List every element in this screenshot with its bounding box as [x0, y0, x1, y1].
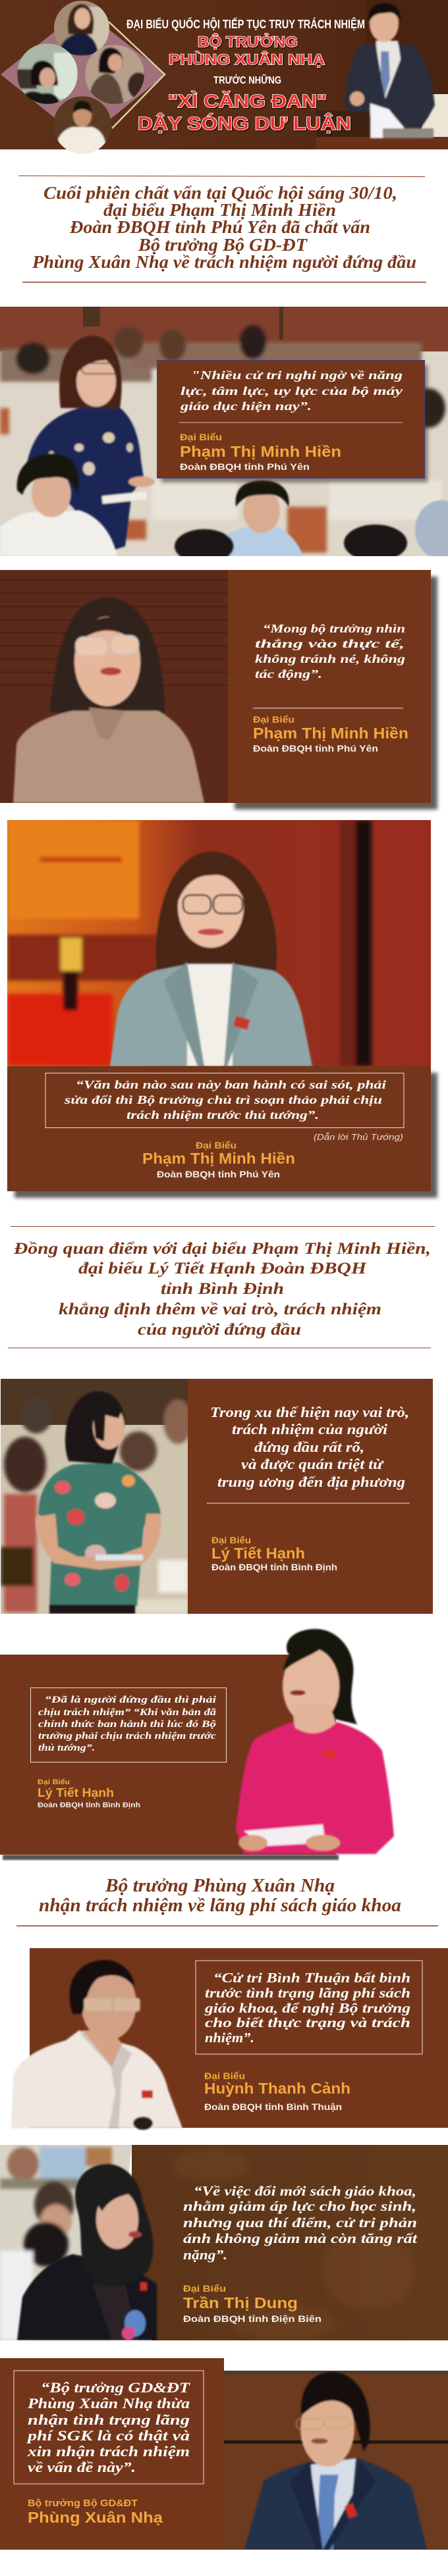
quote card 8: nhận tình trạng lãng — [28, 2411, 190, 2428]
heading: textbook responsibility — [16, 1876, 438, 1926]
quote card 8 — [0, 2358, 224, 2550]
quote card 4: Đoàn ĐBQH tỉnh Bình Định — [211, 1562, 337, 1572]
quote text 7: Đoàn ĐBQH tỉnh Điện Biên — [183, 2313, 322, 2324]
quote card 1: giáo dục hiện nay”. — [180, 399, 312, 413]
quote card 2: thẳng vào thực tế, — [255, 637, 405, 650]
delegate in grey jacket — [110, 852, 312, 1066]
quote card 2: tác động”. — [255, 667, 322, 681]
quote card 5: Đoàn ĐBQH tỉnh Bình Định — [38, 1801, 140, 1809]
photo: background delegates and brown panel — [0, 2145, 448, 2340]
photo: minister at the lectern — [224, 2371, 448, 2550]
quote card 6: “Cử tri Bình Thuận bất bình — [213, 1970, 410, 1986]
quote card 6: giáo khoa, để nghị Bộ trưởng — [204, 2000, 410, 2016]
panel: quote 7 Trần Thị Dung — [0, 2145, 448, 2340]
quote card 5 — [0, 1655, 336, 1855]
quote card 5: thủ tướng”. — [38, 1743, 95, 1753]
panel: quote 3 Phạm Thị Minh Hiền — [7, 820, 437, 1198]
quote card 2: Phạm Thị Minh Hiền — [253, 725, 408, 742]
panel: quote 1 Phạm Thị Minh Hiền with chamber photo — [0, 307, 448, 563]
panel shadow — [3, 1855, 339, 1860]
panel shadow — [14, 1073, 437, 1198]
intro text block: Đoàn ĐBQH tỉnh Phú Yên đã chất vấn — [69, 217, 370, 237]
quote card 8: về vấn đề này”. — [28, 2459, 136, 2475]
quote card 2: Đoàn ĐBQH tỉnh Phú Yên — [253, 743, 378, 754]
quote card 5: trưởng phải chịu trách nhiệm trước — [38, 1731, 216, 1741]
quote text 7: Trần Thị Dung — [183, 2294, 298, 2311]
panel: quote 8 Phùng Xuân Nhạ — [0, 2358, 448, 2550]
quote card 4: Lý Tiết Hạnh — [211, 1545, 305, 1562]
panel: quote 5 Lý Tiết Hạnh — [0, 1629, 394, 1860]
intro text block: Phùng Xuân Nhạ về trách nhiệm người đứng đầu — [32, 252, 416, 272]
quote card 3: trách nhiệm trước thủ tướng”. — [126, 1108, 319, 1121]
quote card 3: Phạm Thị Minh Hiền — [142, 1150, 295, 1167]
panel: quote 6 Huỳnh Thanh Cảnh — [11, 1948, 448, 2130]
portrait: woman left — [17, 43, 78, 105]
quote card 4: Trong xu thế hiện nay vai trò, — [210, 1404, 409, 1420]
quote card 1: Đoàn ĐBQH tỉnh Phú Yên — [180, 461, 310, 472]
heading: textbook responsibility: nhận trách nhiệm về lãng phí sách giáo khoa — [39, 1895, 401, 1916]
quote card 6: Đoàn ĐBQH tỉnh Bình Thuận — [204, 2101, 342, 2112]
quote card 3: “Văn bản nào sau này ban hành có sai sót, phải — [76, 1078, 386, 1091]
quote card 6: Huỳnh Thanh Cảnh — [204, 2080, 350, 2097]
header title: TRƯỚC NHỮNG — [213, 73, 281, 86]
quote card 2: không tránh né, không — [255, 652, 405, 665]
portrait: woman right — [85, 45, 149, 105]
quote card 3: Đoàn ĐBQH tỉnh Phú Yên — [157, 1169, 280, 1179]
quote card 8: Phùng Xuân Nhạ thừa — [27, 2395, 190, 2411]
quote card 1: Đại Biểu — [180, 432, 222, 442]
quote card 4 — [188, 1379, 433, 1614]
quote card 8: Phùng Xuân Nhạ — [28, 2509, 163, 2526]
quote text 7: nhưng qua thí điểm, cử tri phản — [183, 2215, 417, 2230]
header wood backdrop — [316, 0, 448, 149]
quote card 5: “Đã là người đứng đầu thì phải — [45, 1695, 217, 1705]
heading: Lý Tiết Hạnh section: của người đứng đầu — [138, 1321, 301, 1339]
minister portrait in header — [344, 3, 435, 138]
panel shadow — [235, 577, 437, 810]
quote card 4: và được quán triệt từ — [241, 1456, 384, 1472]
portrait: delegate in pink — [236, 1629, 394, 1854]
portrait: man in white shirt — [11, 1960, 182, 2130]
header title — [126, 17, 365, 134]
heading: Lý Tiết Hạnh section — [8, 1226, 435, 1348]
quote card 1: lực, tâm lực, uy lực của bộ máy — [181, 384, 403, 398]
quote card 2: Đại Biểu — [253, 714, 294, 725]
quote card 2: “Mong bộ trưởng nhìn — [263, 622, 405, 635]
quote card 4: đứng đầu rất rõ, — [254, 1439, 364, 1455]
quote card 4: Đại Biểu — [211, 1535, 251, 1545]
quote card 1: Phạm Thị Minh Hiền — [180, 443, 341, 460]
quote card 1: "Nhiều cử tri nghi ngờ về năng — [191, 369, 403, 382]
panel: quote 4 Lý Tiết Hạnh — [1, 1379, 433, 1614]
header title: DẬY SÓNG DƯ LUẬN — [138, 113, 351, 134]
photo: delegate portrait — [0, 570, 228, 803]
header title: ĐẠI BIỂU QUỐC HỘI TIẾP TỤC TRUY TRÁCH NHIỆM — [126, 17, 365, 31]
heading: Lý Tiết Hạnh section: tỉnh Bình Định — [161, 1280, 284, 1298]
heading: Lý Tiết Hạnh section: Đồng quan điểm với đại biểu Phạm Thị Minh Hiền, — [13, 1240, 431, 1258]
quote card 6: cho biết thực trạng và trách — [205, 2015, 410, 2030]
panel: quote 2 Phạm Thị Minh Hiền — [0, 570, 437, 810]
quote text 7: nhằm giảm áp lực cho học sinh, — [183, 2198, 416, 2214]
quote card 8: “Bộ trưởng GD&ĐT — [41, 2379, 191, 2396]
quote card 6: nhiệm”. — [205, 2030, 254, 2046]
header title: "XÌ CĂNG ĐAN" — [168, 91, 327, 111]
header title: PHÙNG XUÂN NHẠ — [169, 51, 325, 68]
quote card 3: Đại Biểu — [196, 1140, 237, 1150]
quote text 7: Đại Biểu — [183, 2283, 226, 2294]
portrait: woman top — [54, 1, 109, 56]
heading: textbook responsibility: Bộ trưởng Phùng Xuân Nhạ — [105, 1876, 335, 1896]
seated man right — [175, 480, 448, 563]
quote card 3: (Dẫn lời Thủ Tướng) — [314, 1132, 403, 1142]
callout shadow — [161, 365, 428, 482]
delegate speaking — [17, 2164, 157, 2340]
quote text 7: ánh không giảm mà còn tăng rất — [183, 2230, 418, 2246]
quote card 8: Bộ trưởng Bộ GD&ĐT — [28, 2498, 138, 2509]
header banner — [0, 0, 448, 155]
quote text 7 — [183, 2183, 418, 2324]
diamond frame with portraits — [1, 0, 166, 155]
quote card 8: xin nhận trách nhiệm — [27, 2443, 190, 2460]
quote card 5: Đại Biểu — [38, 1778, 70, 1786]
quote card 4: trung ương đến địa phương — [217, 1474, 405, 1490]
quote card 6 — [30, 1948, 448, 2128]
intro text block: Cuối phiên chất vấn tại Quốc hội sáng 30/10, — [43, 183, 397, 203]
intro text block: Bộ trưởng Bộ GD-ĐT — [138, 235, 308, 255]
quote card 3: sửa đổi thì Bộ trưởng chủ trì soạn thảo phải chịu — [64, 1093, 382, 1106]
header title: BỘ TRƯỞNG — [198, 34, 298, 50]
quote text 7: nặng”. — [183, 2247, 227, 2263]
quote card 8: phí SGK là có thật và — [26, 2427, 190, 2444]
intro text block: đại biểu Phạm Thị Minh Hiền — [103, 200, 336, 220]
seated man left — [0, 454, 117, 556]
quote card 5: Lý Tiết Hạnh — [38, 1786, 114, 1799]
photo: delegate in floral blouse — [1, 1379, 192, 1614]
quote text 7: “Về việc đổi mới sách giáo khoa, — [194, 2183, 416, 2199]
quote card 5: chính thức ban hành thì lúc đó Bộ — [38, 1719, 216, 1730]
intro text block — [18, 175, 426, 283]
quote card 6: Đại Biểu — [204, 2071, 245, 2081]
quote card 3 — [7, 1066, 431, 1191]
quote card 5: chịu trách nhiệm” “Khi văn bản đã — [38, 1707, 217, 1718]
standing delegate — [26, 336, 155, 553]
heading: Lý Tiết Hạnh section: khẳng định thêm về vai trò, trách nhiệm — [59, 1301, 381, 1318]
photo: delegate in hall — [7, 820, 431, 1066]
quote card 4: trách nhiệm của người — [232, 1421, 388, 1437]
portrait: man bottom — [53, 96, 111, 155]
quote card 2 — [228, 570, 431, 803]
quote card 1 — [157, 361, 424, 478]
quote card 6: trước tình trạng lãng phí sách — [205, 1985, 410, 2001]
heading: Lý Tiết Hạnh section: đại biểu Lý Tiết Hạnh Đoàn ĐBQH — [78, 1260, 368, 1277]
photo: chamber with standing delegate — [0, 307, 448, 563]
